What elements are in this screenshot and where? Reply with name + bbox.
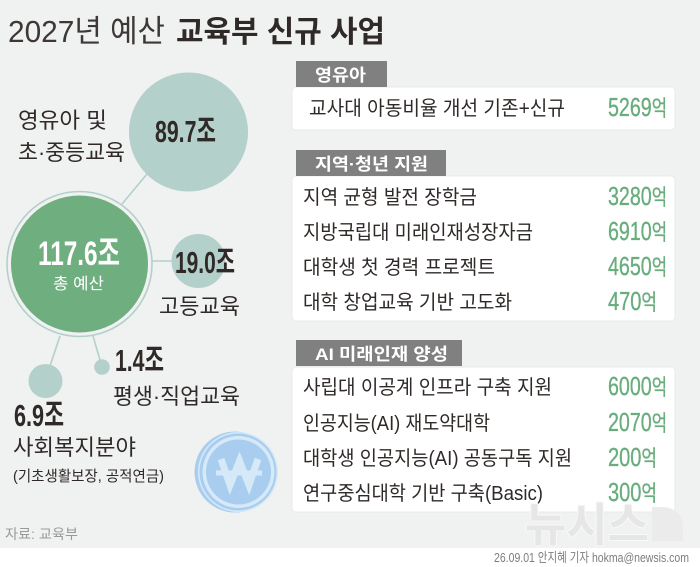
bubble: 고등교육: 고등교육 bbox=[159, 294, 240, 319]
source: 자료: 교육부 bbox=[5, 526, 78, 542]
panel: AI 미래인재 양성: 연구중심대학 기반 구축(Basic) bbox=[303, 482, 543, 505]
title bbox=[8, 14, 385, 49]
bubble: 사회복지분야: 사회복지분야 bbox=[13, 435, 136, 460]
bubble: 유아 및 초중등교육: 영유아 및 bbox=[18, 108, 107, 133]
bubble: total budget bbox=[7, 192, 152, 336]
bubble: total budget: 총 예산 bbox=[53, 275, 104, 293]
panel: 영유아: 영유아 bbox=[315, 66, 366, 85]
panel: AI 미래인재 양성: 300억 bbox=[608, 477, 657, 507]
bubble: 사회복지분야: (기초생활보장, 공적연금) bbox=[13, 468, 164, 485]
title: 교육부 신규 사업 bbox=[176, 16, 385, 49]
bubble: total budget: 117.6조 bbox=[38, 235, 120, 273]
panel: 지역·청년 지원: 지역 균형 발전 장학금 bbox=[303, 186, 477, 209]
bubble: 평생직업교육 bbox=[94, 343, 240, 409]
panel: AI 미래인재 양성: 사립대 이공계 인프라 구축 지원 bbox=[303, 376, 552, 399]
panel: AI 미래인재 양성: 200억 bbox=[608, 442, 657, 472]
panel: 영유아: 5269억 bbox=[608, 92, 667, 122]
panel: 지역·청년 지원: 470억 bbox=[608, 286, 657, 316]
bubble: 사회복지분야: 6.9조 bbox=[14, 398, 64, 433]
panel: 영유아: 교사대 아동비율 개선 기존+신규 bbox=[309, 97, 565, 120]
panel: 지역·청년 지원: 지방국립대 미래인재성장자금 bbox=[303, 221, 533, 244]
bubble: 평생직업교육: 평생·직업교육 bbox=[113, 384, 240, 409]
panel: 지역·청년 지원: 대학생 첫 경력 프로젝트 bbox=[303, 256, 495, 279]
panel: 지역·청년 지원: 대학 창업교육 기반 고도화 bbox=[303, 291, 512, 314]
bubble: 평생직업교육: 1.4조 bbox=[115, 343, 164, 378]
watermark: newsis logo: 뉴시스 bbox=[525, 499, 649, 551]
panel: 지역·청년 지원: 6910억 bbox=[608, 216, 667, 246]
panel: AI 미래인재 양성: 인공지능(AI) 재도약대학 bbox=[303, 412, 490, 435]
panel: AI 미래인재 양성: 대학생 인공지능(AI) 공동구독 지원 bbox=[303, 447, 572, 470]
bubble: 고등교육 bbox=[159, 234, 240, 319]
connector lines bbox=[50, 174, 174, 366]
panel: AI 미래인재 양성 bbox=[292, 340, 675, 512]
panel: AI 미래인재 양성: AI 미래인재 양성 bbox=[315, 345, 448, 364]
icon: won coin bbox=[194, 432, 278, 512]
panel: 지역·청년 지원: 4650억 bbox=[608, 251, 667, 281]
bubble: 유아 및 초중등교육: 89.7조 bbox=[155, 114, 216, 149]
panel: 지역·청년 지원: 3280억 bbox=[608, 181, 667, 211]
bubble: 유아 및 초중등교육: 초·중등교육 bbox=[18, 140, 125, 165]
panel: 지역·청년 지원 bbox=[292, 150, 675, 321]
panel: AI 미래인재 양성: 6000억 bbox=[608, 371, 667, 401]
title: 2027년 예산 bbox=[8, 14, 165, 49]
bubble: 사회복지분야 bbox=[13, 364, 164, 485]
panel: AI 미래인재 양성: 2070억 bbox=[608, 407, 667, 437]
panel: 지역·청년 지원: 지역·청년 지원 bbox=[315, 155, 428, 174]
bubble: 유아 및 초중등교육 bbox=[18, 72, 248, 192]
bubble: 고등교육: 19.0조 bbox=[175, 245, 235, 280]
panel: 영유아 bbox=[292, 61, 675, 130]
